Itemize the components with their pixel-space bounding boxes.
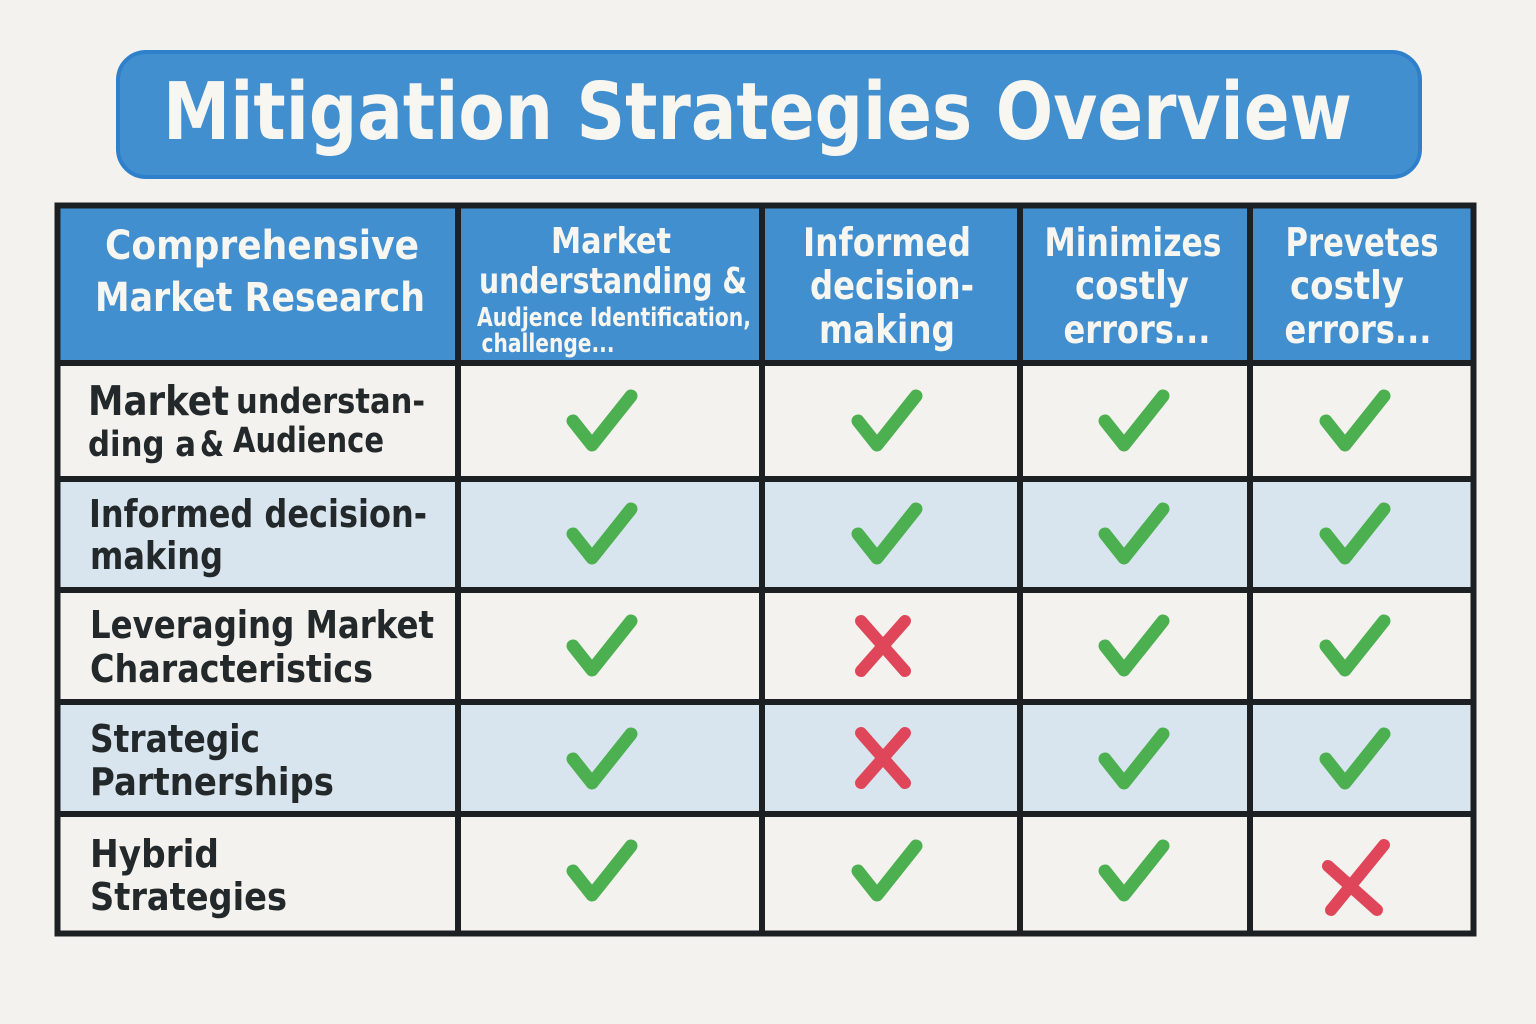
row labels: Hybrid (90, 832, 219, 876)
row labels: Partnerships (90, 760, 334, 804)
header labels: Prevetes (1286, 221, 1438, 266)
header labels: decision- (810, 264, 974, 309)
header labels (95, 221, 1438, 359)
status marks (573, 396, 1384, 910)
row stripes (58, 481, 1473, 813)
header labels: costly (1075, 264, 1189, 309)
row labels: Market (88, 377, 229, 425)
header row background (58, 206, 1473, 363)
title: Mitigation Strategies Overview (163, 66, 1352, 158)
header labels: errors... (1284, 308, 1432, 353)
row labels: Strategic (90, 717, 260, 761)
title banner (118, 52, 1420, 177)
grid lines (58, 206, 1474, 934)
row labels: Audience (233, 421, 384, 461)
header labels: understanding & (479, 261, 747, 302)
row labels: Informed decision- (89, 492, 427, 536)
row labels: ding a (88, 425, 196, 465)
header labels: Audjence Identification, (477, 303, 751, 333)
row labels: making (90, 534, 223, 578)
row labels: understan- (236, 382, 425, 422)
header labels: Informed (803, 221, 971, 266)
header labels: challenge... (482, 329, 614, 359)
header labels: costly (1290, 264, 1404, 309)
header labels: Market Research (95, 275, 425, 321)
header labels: making (819, 308, 955, 353)
row labels: Strategies (90, 875, 287, 919)
row labels: Leveraging Market (90, 603, 434, 647)
row labels (88, 377, 434, 919)
header labels: Comprehensive (105, 223, 419, 269)
comparison table (58, 206, 1474, 934)
header labels: Market (551, 221, 671, 262)
row labels: Characteristics (90, 647, 373, 691)
header labels: errors... (1064, 308, 1210, 353)
header labels: Minimizes (1044, 221, 1222, 266)
row labels: & (200, 425, 224, 465)
